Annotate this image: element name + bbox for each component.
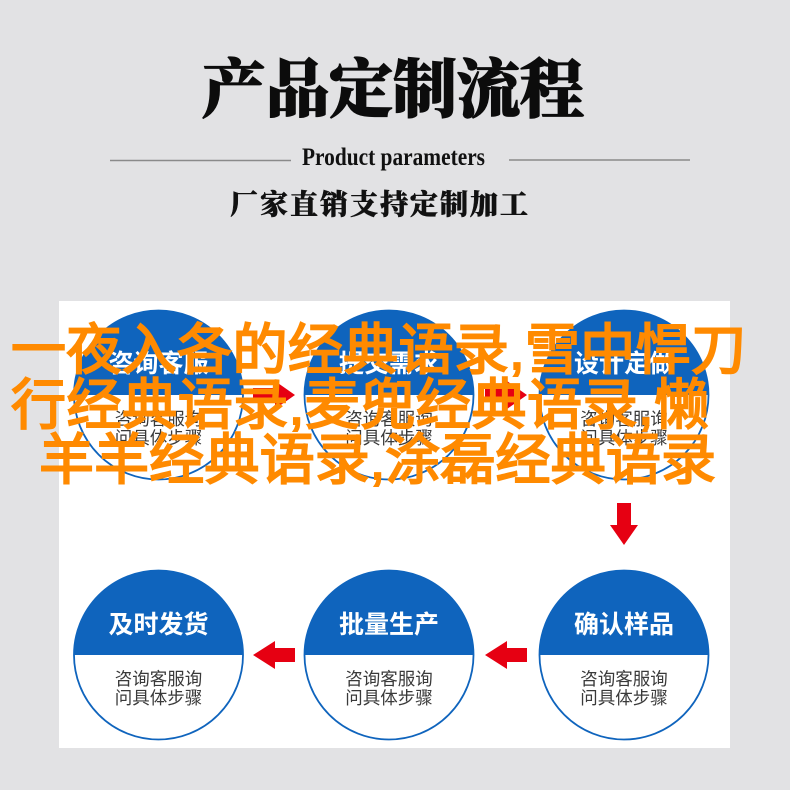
step 5: mass production bbox=[304, 570, 474, 740]
step 6: prompt delivery: 及时发货 bbox=[108, 611, 209, 639]
step 1: consult customer service: 咨询客服 bbox=[108, 349, 209, 378]
step 3: custom design: 问具体步骤 bbox=[580, 428, 668, 448]
step 1: consult customer service: 问具体步骤 bbox=[115, 428, 202, 448]
step 1: consult customer service bbox=[74, 310, 243, 480]
step 3: custom design: 设计定做 bbox=[574, 350, 674, 378]
arrow: step 2 to 3 bbox=[485, 381, 527, 409]
step 5: mass production: 咨询客服询 bbox=[345, 669, 433, 689]
arrow: step 5 to 6 bbox=[253, 641, 295, 669]
orange overlay headline: 行经典语录,麦兜经典语录,懒 bbox=[11, 374, 709, 436]
step 5: mass production: 问具体步骤 bbox=[345, 688, 433, 708]
step 4: confirm sample: 确认样品 bbox=[574, 611, 674, 639]
arrow: step 3 to 4 bbox=[610, 503, 638, 545]
step 4: confirm sample: 咨询客服询 bbox=[580, 669, 668, 689]
step 2: submit requirements bbox=[304, 310, 474, 480]
step 4: confirm sample: 问具体步骤 bbox=[580, 688, 668, 708]
step 6: prompt delivery: 咨询客服询 bbox=[115, 669, 202, 689]
step 2: submit requirements: 咨询客服询 bbox=[345, 409, 433, 429]
tagline: 厂家直销支持定制加工 bbox=[230, 188, 528, 221]
step 4: confirm sample bbox=[540, 570, 708, 740]
step 2: submit requirements: 提交需求 bbox=[339, 350, 439, 378]
orange overlay headline: 一夜入各的经典语录,雪中悍刀 bbox=[11, 319, 746, 381]
title: 产品定制流程 bbox=[202, 55, 584, 126]
panel: process flow bbox=[59, 301, 730, 748]
step 2: submit requirements: 问具体步骤 bbox=[345, 428, 433, 448]
step 6: prompt delivery bbox=[74, 570, 243, 740]
arrow: step 1 to 2 bbox=[253, 381, 295, 409]
step 5: mass production: 批量生产 bbox=[339, 611, 439, 639]
step 3: custom design: 咨询客服询 bbox=[580, 409, 668, 429]
arrow: step 4 to 5 bbox=[485, 641, 527, 669]
subtitle: Product parameters: Product parameters bbox=[302, 144, 485, 171]
step 3: custom design bbox=[540, 310, 708, 480]
step 6: prompt delivery: 问具体步骤 bbox=[115, 688, 202, 708]
orange overlay headline bbox=[11, 319, 746, 491]
orange overlay headline: 羊羊经典语录,涂磊经典语录 bbox=[39, 429, 716, 491]
step 1: consult customer service: 咨询客服询 bbox=[115, 409, 202, 429]
